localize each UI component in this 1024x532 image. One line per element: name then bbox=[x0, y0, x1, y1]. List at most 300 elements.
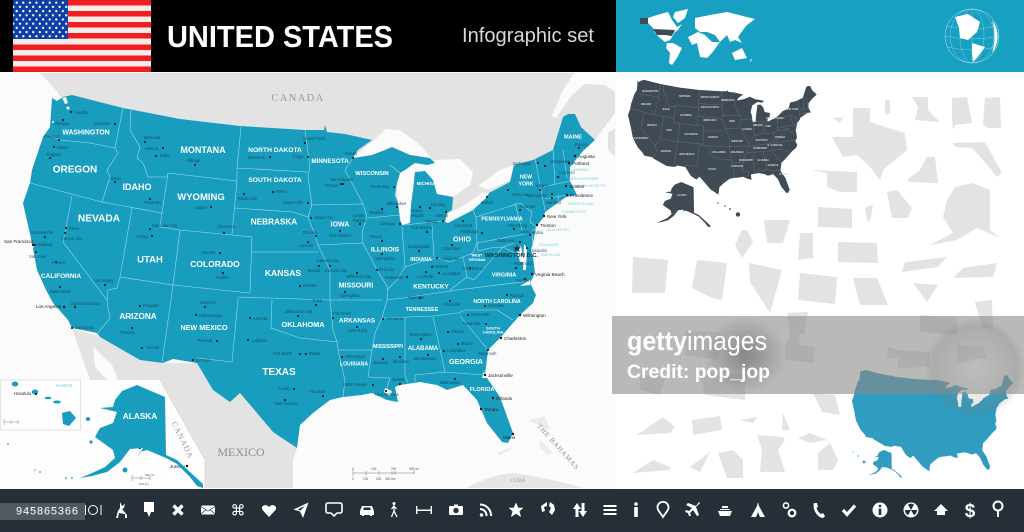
dark map state names: NORTH DAKOTA bbox=[701, 96, 720, 99]
icon: star bbox=[508, 502, 524, 517]
main scale bar: 0 bbox=[352, 477, 354, 481]
city markers and names: Missoula bbox=[144, 135, 161, 140]
city markers and names: Columbia bbox=[463, 321, 481, 326]
globe bbox=[945, 9, 999, 63]
city markers and names: Bismarck bbox=[248, 155, 266, 160]
city markers and names: Topeka bbox=[307, 268, 321, 273]
state names: IOWA bbox=[331, 222, 349, 228]
city markers and names: Norfolk bbox=[516, 278, 530, 283]
city names outside the state fill: Virginia Beach bbox=[535, 272, 565, 277]
city markers and names bbox=[29, 110, 589, 449]
city markers and names: Pittsburgh bbox=[460, 229, 479, 234]
city markers and names: Green Bay bbox=[370, 184, 391, 189]
icon: camera bbox=[449, 504, 463, 515]
city markers and names: Cincinnati bbox=[441, 256, 459, 261]
city markers and names: St Paul bbox=[325, 183, 338, 188]
state names: OREGON bbox=[53, 164, 97, 176]
icon: command: ⌘ bbox=[230, 502, 246, 520]
city markers and names: Reno bbox=[69, 226, 80, 231]
main scale bar: 100 bbox=[371, 467, 377, 471]
icon: walking person bbox=[392, 502, 397, 517]
city markers and names: Casper bbox=[194, 205, 208, 210]
small northeastern state names: VERMONT bbox=[572, 168, 590, 172]
grey state silhouettes bbox=[632, 97, 1015, 478]
city markers and names: Cheyenne bbox=[217, 224, 236, 229]
city markers and names: El Paso bbox=[196, 358, 211, 363]
city markers and names: Springfield bbox=[527, 193, 547, 198]
city markers and names: Toledo bbox=[425, 219, 438, 224]
state names: MONTANA bbox=[180, 145, 226, 155]
land: Cuba bbox=[467, 473, 583, 488]
city names outside the state fill: Orlando bbox=[496, 396, 513, 401]
dark map state names: TEXAS bbox=[708, 168, 716, 171]
state names: NEVADA bbox=[78, 214, 121, 224]
city markers and names: Amarillo bbox=[253, 316, 269, 321]
city markers and names: St Louis bbox=[379, 267, 394, 272]
dark map state names: SOUTH DAKOTA bbox=[701, 106, 720, 109]
city names outside the state fill: Trenton bbox=[540, 223, 556, 228]
city markers and names: Butte bbox=[160, 153, 170, 158]
city markers and names: Duluth bbox=[345, 151, 358, 156]
city markers and names: Dallas bbox=[309, 351, 320, 356]
dark map state names: COLORADO bbox=[684, 133, 698, 136]
Washington DC label: WASHINGTON D.C. bbox=[485, 253, 538, 259]
state names: CAROLINA bbox=[482, 330, 504, 334]
city markers and names: Sioux Falls bbox=[283, 200, 303, 205]
city markers and names: Baltimore bbox=[497, 238, 515, 243]
small northeastern state names: NEW HAMPSHIRE bbox=[569, 177, 599, 181]
city names outside the state fill: Wilmington bbox=[523, 313, 546, 318]
dark map state names: KENTUCKY bbox=[756, 140, 769, 142]
city markers and names: Bakersfield bbox=[50, 289, 71, 294]
city names outside the state fill bbox=[4, 154, 595, 469]
city markers and names: Wichita bbox=[303, 283, 317, 288]
city markers and names: Helena bbox=[145, 146, 159, 151]
dark map state names: MONTANA bbox=[679, 95, 691, 98]
small northeastern state names: MARYLAND bbox=[541, 253, 561, 257]
state names: INDIANA bbox=[410, 257, 432, 263]
world map bbox=[640, 9, 755, 65]
city markers and names: Pierre bbox=[276, 189, 288, 194]
main scale bar: 100 bbox=[363, 477, 369, 481]
small northeastern state names: RHODE ISLAND bbox=[568, 202, 594, 206]
city markers and names: Rapid City bbox=[238, 196, 258, 201]
city markers and names: Savannah bbox=[478, 351, 497, 356]
dark map state names: INDIANA bbox=[753, 124, 763, 127]
dark map state names: MINNESOTA bbox=[721, 99, 735, 102]
city markers and names: Detroit bbox=[436, 213, 449, 218]
dark map state names: NEVADA bbox=[647, 124, 657, 127]
city markers and names: Sioux City bbox=[315, 215, 334, 220]
city markers and names: Las Vegas bbox=[94, 278, 113, 283]
city markers and names: Des Moines bbox=[329, 233, 351, 238]
state names: CALIFORNIA bbox=[41, 273, 81, 280]
city markers and names: New Orleans bbox=[375, 392, 399, 397]
gulf of st lawrence bbox=[552, 73, 615, 118]
dark map state names: KANSAS bbox=[708, 136, 718, 139]
watermark band bbox=[612, 316, 1024, 418]
city markers and names: Sacramento bbox=[31, 230, 54, 235]
state names: ALABAMA bbox=[408, 346, 439, 352]
dark map state names: OREGON bbox=[641, 104, 651, 106]
watermark text: Credit: pop_jop bbox=[627, 361, 770, 383]
state names: MISSISSIPPI bbox=[373, 344, 403, 350]
city markers and names: Birmingham bbox=[410, 332, 432, 337]
icon: speech bubble bbox=[326, 503, 342, 516]
state names: NEBRASKA bbox=[251, 218, 297, 226]
state names: MISSOURI bbox=[339, 282, 373, 290]
icon: radiation bbox=[904, 502, 918, 518]
icon: tent bbox=[751, 502, 765, 517]
icon: heart bbox=[262, 505, 276, 517]
state names: NORTH DAKOTA bbox=[248, 147, 302, 154]
icon: gears bbox=[783, 503, 795, 516]
city markers and names: Billings bbox=[187, 158, 200, 163]
icon: info letter bbox=[634, 502, 638, 517]
icon: information bbox=[872, 502, 888, 518]
icon: car bbox=[360, 506, 374, 516]
city markers and names: Omaha bbox=[303, 230, 317, 235]
white panel behind Alaska and Hawaii bbox=[0, 380, 205, 488]
state names: VIRGINIA bbox=[492, 272, 516, 278]
city markers and names: San Diego bbox=[75, 325, 95, 330]
dark United States map bbox=[628, 80, 817, 227]
country label: The Bahamas: THE BAHAMAS bbox=[535, 422, 581, 472]
state names: COLORADO bbox=[190, 259, 240, 269]
subtitle: Infographic set bbox=[462, 25, 594, 47]
dark map state names: FLORIDA bbox=[779, 173, 789, 176]
Alaska scale bar: 200 mi bbox=[145, 473, 154, 477]
city markers and names: Baton Rouge bbox=[343, 382, 368, 387]
city markers and names: Bangor bbox=[575, 142, 589, 147]
city markers and names: Fort Smith bbox=[332, 311, 352, 316]
dark map state names: IOWA bbox=[729, 120, 735, 123]
state names: NEW MEXICO bbox=[180, 323, 228, 332]
state names bbox=[41, 130, 582, 393]
icon: comment bbox=[144, 502, 154, 517]
icon: mail bbox=[201, 506, 215, 514]
state names: NEW bbox=[520, 174, 532, 180]
city markers and names: Boise bbox=[111, 176, 122, 181]
state names: WEST bbox=[472, 254, 483, 258]
icon: close bbox=[174, 506, 182, 514]
city markers and names: Mobile bbox=[392, 377, 405, 382]
city markers and names: Lubbock bbox=[252, 338, 268, 343]
main scale bar: 300 mi bbox=[409, 467, 419, 471]
main scale bar: 300 km bbox=[385, 477, 396, 481]
icon: deer bbox=[116, 502, 127, 518]
small northeastern state names: CONNECTICUT bbox=[562, 210, 588, 214]
icon bar bbox=[0, 489, 1024, 532]
dark map state names: NEW MEXICO bbox=[679, 154, 695, 156]
country label: Canada: CANADA bbox=[271, 93, 325, 104]
state names: SOUTH DAKOTA bbox=[248, 177, 302, 184]
state names: TEXAS bbox=[262, 367, 296, 378]
title: UNITED STATES bbox=[167, 19, 393, 54]
city names outside the state fill: Portland bbox=[572, 161, 590, 166]
city markers and names: Charleston bbox=[463, 266, 484, 271]
city markers and names: Madison bbox=[369, 210, 385, 215]
city names outside the state fill: Los Angeles bbox=[36, 304, 62, 309]
city names outside the state fill: New York bbox=[547, 214, 567, 219]
Alaska map: ALASKA bbox=[123, 411, 157, 421]
icon: airplane bbox=[685, 502, 700, 516]
city markers and names: Fort Worth bbox=[273, 351, 293, 356]
city markers and names: Oakland bbox=[37, 242, 53, 247]
icon: navigation arrow bbox=[294, 502, 308, 518]
city markers and names: Knoxville bbox=[444, 302, 461, 307]
city markers and names: Pocatello bbox=[144, 200, 162, 205]
city markers and names: Richmond bbox=[514, 261, 533, 266]
icon: bed bbox=[416, 506, 432, 514]
state names: TENNESSEE bbox=[406, 307, 439, 313]
city markers and names: Evansville bbox=[385, 275, 404, 280]
city markers and names: Carson City bbox=[61, 236, 83, 241]
state names: UTAH bbox=[137, 254, 163, 266]
state names: OKLAHOMA bbox=[282, 320, 325, 329]
city markers and names: Austin bbox=[278, 386, 290, 391]
state names: ARKANSAS bbox=[339, 318, 376, 324]
city markers and names: Minneapolis bbox=[331, 177, 353, 182]
city markers and names: Jackson bbox=[373, 360, 389, 365]
city markers and names: Salt Lake City bbox=[152, 223, 178, 228]
small northeastern state names: DELAWARE bbox=[539, 243, 559, 247]
state names: MICHIGAN bbox=[417, 181, 439, 186]
city markers and names: Frankfort bbox=[432, 264, 449, 269]
land: Mexico bbox=[72, 328, 297, 488]
city markers and names: Buffalo bbox=[481, 200, 494, 205]
icon: rss bbox=[480, 504, 491, 517]
state names: IDAHO bbox=[122, 182, 152, 192]
city markers and names: Montpelier bbox=[550, 159, 570, 164]
city markers and names: Louisville bbox=[417, 274, 435, 279]
state names: SOUTH bbox=[486, 326, 500, 330]
city markers and names: Olympia bbox=[54, 121, 70, 126]
city markers and names: Grand bbox=[411, 208, 423, 213]
city markers and names: Greenville bbox=[471, 312, 490, 317]
city markers and names: Spokane bbox=[94, 121, 111, 126]
Alaska map bbox=[7, 385, 203, 488]
city markers and names: Lexington bbox=[443, 271, 461, 276]
dark map state names: ARKANSAS bbox=[730, 151, 744, 154]
dark map state names: MISSOURI bbox=[731, 141, 743, 143]
state names: KENTUCKY bbox=[413, 284, 449, 290]
city names outside the state fill: Charleston bbox=[504, 336, 527, 341]
icon: check mark bbox=[843, 506, 855, 514]
state names: VIRGINIA bbox=[469, 258, 486, 262]
city markers and names: Cedar bbox=[353, 213, 365, 218]
city markers and names: Burlington bbox=[513, 161, 532, 166]
country label: Cuba: CUBA bbox=[510, 478, 526, 484]
icons row bbox=[85, 501, 1002, 522]
dark map state names: TENNESSEE bbox=[753, 148, 767, 150]
dark map state names: NEBRASKA bbox=[703, 119, 717, 122]
city names outside the state fill: Providence bbox=[570, 193, 593, 198]
city markers and names: Little Rock bbox=[348, 328, 368, 333]
city markers and names: Harrisburg bbox=[508, 223, 528, 228]
dark map state names: NEW YORK bbox=[786, 109, 799, 111]
main United States map bbox=[23, 95, 595, 448]
small northeastern state names: MASSACHUSETTS bbox=[575, 184, 606, 188]
city markers and names: Columbus bbox=[442, 246, 460, 251]
city markers and names: Shreveport bbox=[345, 354, 366, 359]
city markers and names: Meridian bbox=[393, 359, 409, 364]
dark map state names: ILLINOIS bbox=[742, 129, 752, 131]
city markers and names: Kansas City bbox=[317, 258, 340, 263]
city markers and names: Anchorage bbox=[129, 441, 150, 446]
city markers and names: Fort Wayne bbox=[411, 225, 433, 230]
dark map state names: ALABAMA bbox=[757, 159, 769, 162]
city markers and names: Milwaukee bbox=[387, 201, 407, 206]
city markers and names: Albany bbox=[536, 183, 549, 188]
city names outside the state fill: Jacksonville bbox=[488, 373, 513, 378]
dark map state names: IDAHO bbox=[662, 108, 670, 111]
city markers and names: Salem bbox=[57, 145, 69, 150]
dark map state names bbox=[634, 90, 799, 197]
main scale bar: 0 bbox=[352, 467, 354, 471]
city markers and names: Indianapolis bbox=[408, 244, 430, 249]
land: Canada bbox=[40, 73, 615, 230]
Hawaii inset bbox=[0, 380, 80, 430]
image id tag: 945865366 bbox=[16, 506, 78, 518]
city markers and names: Montgomery bbox=[414, 356, 438, 361]
small northeastern state names: NEW JERSEY bbox=[547, 228, 570, 232]
city names outside the state fill: Boston bbox=[570, 184, 585, 189]
Great Lakes bbox=[353, 129, 514, 225]
icon: plate and cutlery bbox=[85, 505, 102, 515]
city markers and names: Philadelphia bbox=[521, 230, 544, 235]
dark map state names: ALASKA bbox=[677, 194, 687, 197]
state names: ARIZONA bbox=[119, 312, 157, 321]
country label: Mexico: MEXICO bbox=[217, 445, 265, 459]
state names: NORTH CAROLINA bbox=[473, 299, 521, 305]
city markers and names: Kansas City bbox=[325, 268, 348, 273]
state names: MAINE bbox=[564, 134, 582, 140]
Hawaii inset: HAWAII bbox=[56, 383, 72, 388]
American flag bbox=[13, 0, 151, 72]
dark map state names: GEORGIA bbox=[768, 164, 779, 167]
right panel background bbox=[616, 72, 1024, 489]
city markers and names: Lansing bbox=[431, 202, 446, 207]
icon: menu bbox=[604, 505, 616, 515]
city names outside the state fill: San Francisco bbox=[4, 239, 34, 244]
city markers and names: Provo bbox=[137, 234, 148, 239]
city names outside the state fill: Juneau bbox=[170, 464, 186, 469]
state names: OHIO bbox=[453, 236, 471, 244]
Alaska scale bar bbox=[132, 473, 154, 486]
city markers and names: San Jose bbox=[29, 254, 47, 259]
header: blue panel bbox=[616, 0, 1024, 72]
country label: Canada by Alaska: CANADA bbox=[170, 420, 195, 460]
city markers and names: Tulsa bbox=[312, 298, 323, 303]
Hawaii inset: Honolulu bbox=[14, 391, 32, 396]
dark map state names: OKLAHOMA bbox=[712, 151, 726, 154]
state names: WYOMING bbox=[177, 192, 225, 203]
city markers and names: Rapids bbox=[353, 218, 366, 223]
icon: up arrow bbox=[934, 504, 948, 515]
city markers and names: Santa Fe bbox=[200, 300, 217, 305]
main scale bar: 200 bbox=[376, 477, 382, 481]
city markers and names: Grand Forks bbox=[303, 136, 326, 141]
city markers and names: Roswell bbox=[198, 338, 212, 343]
city markers and names: Denver bbox=[202, 250, 216, 255]
state names: LOUISIANA bbox=[340, 362, 368, 368]
city markers and names: San Antonio bbox=[275, 401, 298, 406]
city markers and names: Flagstaff bbox=[143, 303, 159, 308]
Alaska scale bar: 200 km bbox=[139, 482, 149, 486]
city markers and names: Fairbanks bbox=[125, 424, 143, 429]
city markers and names: Lincoln bbox=[300, 243, 314, 248]
city markers and names: Syracuse bbox=[512, 192, 530, 197]
city markers and names: Fresno bbox=[52, 260, 65, 265]
city markers and names: Cleveland bbox=[454, 223, 473, 228]
watermark text bbox=[627, 326, 770, 383]
city markers and names: Phoenix bbox=[120, 330, 135, 335]
watermark text: getty bbox=[627, 326, 687, 356]
dark map state names: WASHINGTON bbox=[642, 90, 658, 93]
city markers and names: Eugene bbox=[47, 152, 62, 157]
city markers and names: Jefferson City bbox=[346, 274, 372, 279]
state names: MINNESOTA bbox=[311, 158, 349, 165]
city markers and names: Macon bbox=[461, 341, 474, 346]
main scale bar: 200 bbox=[391, 467, 397, 471]
city markers and names: Raleigh bbox=[510, 293, 525, 298]
icon: ship bbox=[718, 506, 732, 516]
icon: up and down arrows bbox=[573, 503, 587, 517]
city markers and names: Portland bbox=[44, 134, 60, 139]
small blue United States silhouette bbox=[852, 370, 1013, 478]
header: black bar bbox=[0, 0, 616, 72]
state names: WISCONSIN bbox=[355, 171, 389, 177]
Washington DC label bbox=[485, 245, 538, 259]
city markers and names: Houston bbox=[310, 389, 326, 394]
city markers and names: Peoria bbox=[370, 234, 383, 239]
dark map state names: OHIO bbox=[765, 126, 771, 128]
icon: location marker bbox=[994, 502, 1002, 517]
state names: WASHINGTON bbox=[62, 130, 110, 136]
Canada boundary line by Alaska bbox=[160, 380, 205, 488]
state names: KANSAS bbox=[265, 268, 301, 278]
main scale bar bbox=[352, 467, 419, 481]
city markers and names: Springfield bbox=[375, 256, 395, 261]
dark map state names: VIRGINIA bbox=[775, 136, 785, 139]
city markers and names: Annapolis bbox=[529, 248, 547, 253]
dark map state names: PENNSYLVANIA bbox=[766, 117, 784, 120]
city markers and names: Charlotte bbox=[488, 303, 505, 308]
city markers and names: Chicago bbox=[380, 221, 396, 226]
city markers and names: Oklahoma City bbox=[285, 309, 313, 314]
dark map state names: CALIFORNIA bbox=[634, 137, 648, 140]
dark map state names: UTAH bbox=[666, 129, 672, 132]
city names outside the state fill: Miami bbox=[503, 435, 515, 440]
state names: PENNSYLVANIA bbox=[481, 216, 523, 222]
dark map state names: WYOMING bbox=[680, 115, 692, 117]
icon: map pin bbox=[658, 502, 668, 517]
small northeastern state names bbox=[539, 168, 606, 257]
dark map state names: N. CAROLINA bbox=[767, 144, 783, 147]
city markers and names: San Bernardino bbox=[71, 301, 100, 306]
city markers and names: Springfield bbox=[340, 293, 360, 298]
land: Bahamas bbox=[497, 416, 552, 456]
city names outside the state fill: Augusta bbox=[578, 154, 595, 159]
state names: FLORIDA bbox=[470, 387, 494, 393]
city markers and names: Albuquerque bbox=[199, 313, 223, 318]
city markers and names: Scranton bbox=[519, 204, 536, 209]
map background bbox=[0, 72, 616, 489]
icon: globe bbox=[541, 502, 555, 515]
city markers and names: Fargo bbox=[293, 154, 304, 159]
dark map state names: MISSISSIPPI bbox=[739, 160, 753, 162]
